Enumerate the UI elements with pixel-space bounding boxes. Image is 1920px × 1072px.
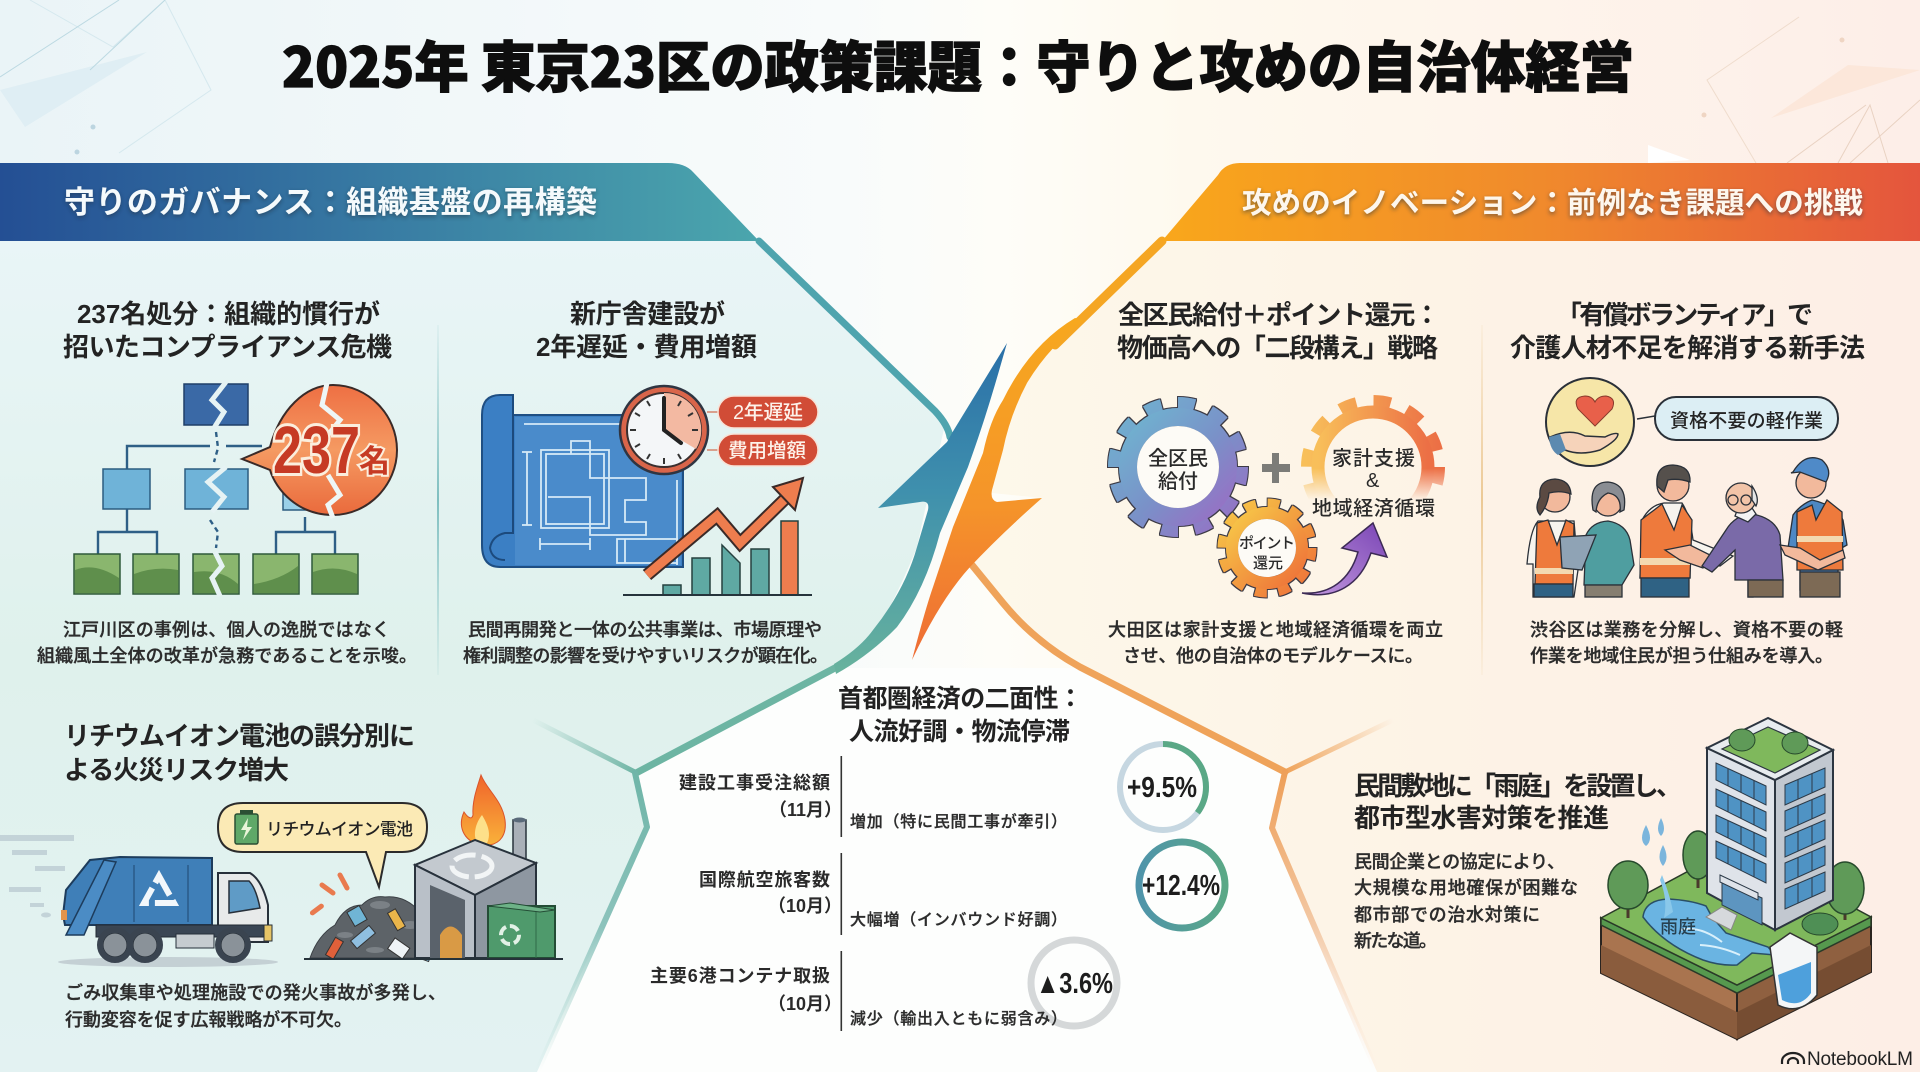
stat ring: -3.6% xyxy=(1031,940,1117,1026)
callout: lithium-ion battery xyxy=(218,803,427,887)
icon: large gear: 全区民 xyxy=(1148,447,1208,470)
heading: paid volunteers: 介護人材不足を解消する新手法 xyxy=(1510,333,1865,363)
heading: rain gardens xyxy=(1354,771,1682,833)
heading: compliance crisis: 237名処分：組織的慣行が xyxy=(77,299,380,329)
callout: two-year delay: 2年遅延 xyxy=(733,401,803,424)
icon: rain garden and building: 雨庭 xyxy=(1660,917,1696,937)
panel: paid volunteers xyxy=(1510,300,1865,666)
icon: volunteer woman xyxy=(1527,479,1578,597)
row: container handling xyxy=(650,951,842,1031)
text: Shibuya ward: 渋谷区は業務を分解し、資格不要の軽 xyxy=(1530,620,1843,640)
stat ring: +9.5% xyxy=(1120,744,1206,830)
heading: paid volunteers xyxy=(1510,300,1865,363)
icon: 237 badge: 名 xyxy=(359,444,390,479)
callout: light work: 資格不要の軽作業 xyxy=(1670,410,1823,432)
heading: rain gardens: 都市型水害対策を推進 xyxy=(1354,803,1609,833)
row: construction orders: 増加（特に民間工事が牽引） xyxy=(850,812,1067,831)
text: Shibuya ward: 作業を地域住民が担う仕組みを導入。 xyxy=(1530,645,1833,666)
row: international passengers xyxy=(699,853,1067,935)
row: construction orders xyxy=(679,756,1067,837)
stat ring: +12.4%: +12.4% xyxy=(1142,870,1220,902)
heading: battery fire risk: よる火災リスク増大 xyxy=(64,755,289,785)
icon: volunteer man xyxy=(1640,465,1733,597)
icon: heart in hand xyxy=(1546,378,1634,466)
text: Edogawa case xyxy=(37,620,417,666)
text: rain garden detail: 新たな道。 xyxy=(1354,931,1437,951)
icon: 237 badge xyxy=(242,383,397,518)
heading: battery fire risk: リチウムイオン電池の誤分別に xyxy=(64,721,415,751)
icon: waste pile xyxy=(310,875,463,962)
panel: rain gardens xyxy=(1354,718,1871,1039)
lightning bolt: offence (orange) xyxy=(912,318,1085,660)
heading: construction delay: 新庁舎建設が xyxy=(570,299,725,329)
callout: lithium-ion battery: リチウムイオン電池 xyxy=(266,820,413,839)
text: rain garden detail: 民間企業との協定により、 xyxy=(1354,852,1565,872)
heading: paid volunteers: 「有償ボランティア」で xyxy=(1556,300,1813,330)
text: redevelopment risk: 権利調整の影響を受けやすいリスクが顕在化。 xyxy=(463,645,828,666)
text: PR strategy: ごみ収集車や処理施設での発火事故が多発し、 xyxy=(65,982,446,1003)
band: defensive governance: 守りのガバナンス：組織基盤の再構築 xyxy=(64,185,597,220)
heading: two-stage strategy xyxy=(1117,300,1440,363)
heading: two-stage strategy: 物価高への「二段構え」戦略 xyxy=(1117,333,1438,363)
lightning bolt: defence (blue) xyxy=(834,343,1007,674)
text: Edogawa case: 江戸川区の事例は、個人の逸脱ではなく xyxy=(63,620,390,640)
row: construction orders: 建設工事受注総額 xyxy=(679,772,830,793)
heading: rain gardens: 民間敷地に「雨庭」を設置し、 xyxy=(1354,771,1682,801)
text: PR strategy: 行動変容を促す広報戦略が不可欠。 xyxy=(65,1009,352,1030)
text: redevelopment risk xyxy=(463,620,828,666)
icon: speed lines xyxy=(0,835,74,918)
icon: blueprint xyxy=(482,395,683,567)
icon: elderly woman xyxy=(1560,482,1634,597)
icon: small gear: ポイント xyxy=(1239,535,1295,552)
text: rain garden detail: 大規模な用地確保が困難な xyxy=(1354,877,1578,898)
panel: compliance crisis xyxy=(37,299,417,666)
band: defensive governance xyxy=(0,163,759,241)
icon: faded outcome gear: & xyxy=(1366,470,1380,492)
icon: rain garden and building xyxy=(1601,718,1871,1039)
heading: construction delay: 2年遅延・費用増額 xyxy=(536,332,757,362)
row: container handling: 主要6港コンテナ取扱 xyxy=(650,966,830,986)
band: offensive innovation xyxy=(1162,163,1920,241)
title: 2025年 東京23区の政策課題：守りと攻めの自治体経営 xyxy=(282,23,1634,103)
stat ring: +9.5%: +9.5% xyxy=(1127,772,1197,804)
text: rain garden detail: 都市部での治水対策に xyxy=(1354,905,1540,925)
panel: new ward office delay xyxy=(463,299,828,666)
text: Edogawa case: 組織風土全体の改革が急務であることを示唆。 xyxy=(37,645,417,666)
heading: compliance crisis xyxy=(63,299,392,362)
row: container handling: （10月） xyxy=(768,994,842,1014)
heading: dual economy: 首都圏経済の二面性： xyxy=(838,685,1083,713)
band: offensive innovation: 攻めのイノベーション：前例なき課題への挑戦 xyxy=(1242,187,1863,220)
icon: cracked org chart xyxy=(74,382,358,596)
text: redevelopment risk: 民間再開発と一体の公共事業は、市場原理や xyxy=(468,620,822,640)
heading: compliance crisis: 招いたコンプライアンス危機 xyxy=(63,332,392,362)
callout: light work xyxy=(1637,397,1838,440)
heading: dual economy xyxy=(838,685,1083,746)
icon: large gear: 給付 xyxy=(1158,470,1198,493)
heading: dual economy: 人流好調・物流停滞 xyxy=(849,718,1070,746)
callout: two-year delay xyxy=(707,396,818,428)
text: rain garden detail xyxy=(1354,852,1578,951)
icon: volunteer with cap xyxy=(1780,458,1847,597)
logo: NotebookLM: NotebookLM xyxy=(1807,1049,1913,1070)
icon: small gear: 還元 xyxy=(1253,555,1283,572)
icon: 237 badge: 237 xyxy=(273,413,360,488)
text: PR strategy xyxy=(65,982,446,1030)
icon: faded outcome gear: 家計支援 xyxy=(1332,447,1415,470)
text: Shibuya ward xyxy=(1530,620,1843,666)
icon: small gear xyxy=(1222,503,1312,593)
row: international passengers: 大幅増（インバウンド好調） xyxy=(850,911,1067,929)
panel: metropolitan economy xyxy=(650,685,1225,1031)
icon: garbage truck xyxy=(58,857,278,967)
callout: cost increase xyxy=(707,434,818,466)
text: Ota ward: 大田区は家計支援と地域経済循環を両立 xyxy=(1108,620,1443,640)
arrow: purple rising xyxy=(1302,523,1387,595)
stat ring: -3.6%: ▲3.6% xyxy=(1036,968,1113,1000)
heading: construction delay xyxy=(536,299,757,362)
icon: faded outcome gear: 地域経済循環 xyxy=(1312,497,1435,520)
icon: large gear xyxy=(1114,403,1242,531)
panel: two-stage strategy xyxy=(1108,300,1443,666)
icon: clock xyxy=(620,386,708,474)
row: international passengers: （10月） xyxy=(768,896,842,916)
callout: cost increase: 費用増額 xyxy=(728,440,806,462)
panel: lithium-ion battery fire xyxy=(0,721,563,1030)
chart: rising cost bars xyxy=(623,478,812,595)
text: Ota ward xyxy=(1108,620,1443,666)
heading: battery fire risk xyxy=(64,721,415,785)
icon: plus xyxy=(1262,453,1290,483)
heading: two-stage strategy: 全区民給付＋ポイント還元： xyxy=(1118,300,1440,330)
row: construction orders: （11月） xyxy=(769,800,842,820)
icon: recycling plant with fire xyxy=(304,775,563,959)
text: Ota ward: させ、他の自治体のモデルケースに。 xyxy=(1123,645,1423,666)
icon: faded outcome gear xyxy=(1307,401,1439,533)
row: international passengers: 国際航空旅客数 xyxy=(699,870,830,890)
icon: elderly man xyxy=(1702,483,1783,597)
text: container note: 減少（輸出入ともに弱含み） xyxy=(850,1010,1067,1028)
stat ring: +12.4% xyxy=(1139,842,1225,928)
